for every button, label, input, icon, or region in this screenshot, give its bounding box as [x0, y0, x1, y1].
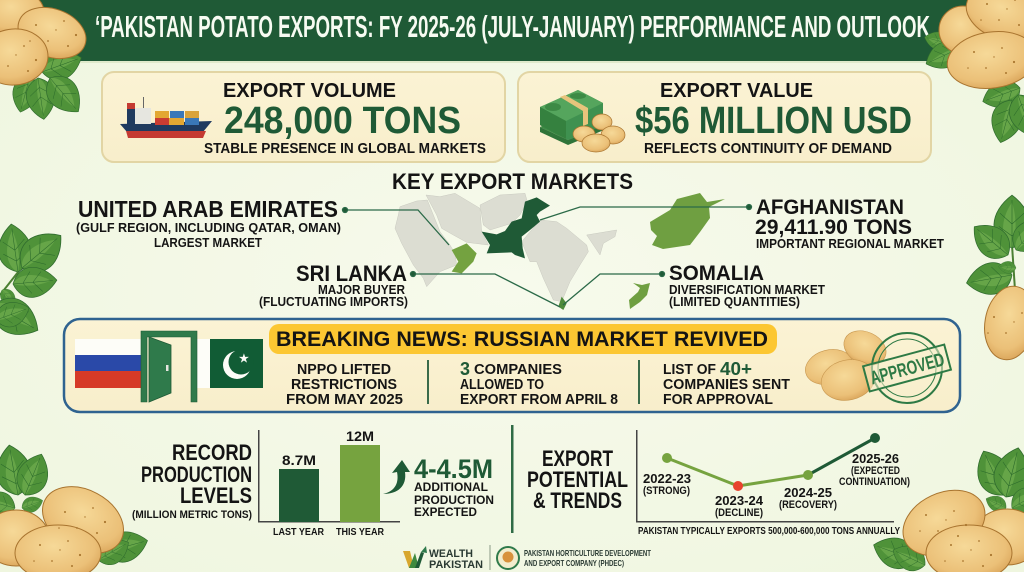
- label: Somalia: [669, 262, 825, 309]
- text: PHDEC name: AND EXPORT COMPANY (PHDEC): [524, 558, 624, 568]
- label: 2025-26: CONTINUATION): [839, 476, 910, 488]
- callout: additional production: EXPECTED: [414, 505, 477, 519]
- icon: potatoes: [801, 324, 892, 405]
- panel: breaking news: [64, 319, 960, 412]
- text: 3 companies allowed: EXPORT FROM APRIL 8: [460, 392, 618, 408]
- label: Somalia: (LIMITED QUANTITIES): [669, 294, 800, 309]
- icon: money and potatoes: [540, 90, 625, 152]
- decoration: top-right potatoes and leaves: [921, 0, 1024, 146]
- headline pill: BREAKING NEWS: RUSSIAN MARKET REVIVED: [276, 328, 768, 351]
- label: 2024-25: (RECOVERY): [779, 499, 837, 511]
- label: Sri Lanka: (FLUCTUATING IMPORTS): [259, 294, 408, 309]
- logo: PHDEC emblem: [497, 547, 519, 569]
- text: PHDEC name: [524, 548, 652, 568]
- heading: record production levels: RECORD: [172, 440, 252, 465]
- text: NPPO restrictions lifted: FROM MAY 2025: [286, 392, 403, 408]
- panel: export volume: EXPORT VOLUME: [223, 80, 396, 102]
- decoration: bottom-right potatoes and leaves: [869, 444, 1024, 572]
- callout: additional production: PRODUCTION: [414, 493, 494, 507]
- logo: Wealth Pakistan: [403, 546, 483, 571]
- bar chart: production: THIS YEAR: [336, 527, 385, 538]
- label: 2023-24: [715, 493, 764, 519]
- label: United Arab Emirates: LARGEST MARKET: [154, 235, 262, 250]
- heading: export potential and trends: POTENTIAL: [527, 467, 628, 492]
- label: United Arab Emirates: (GULF REGION, INCLUDING QATAR, OMAN): [76, 220, 341, 235]
- label: 2023-24: (DECLINE): [715, 507, 763, 519]
- heading: record production levels: LEVELS: [180, 483, 252, 508]
- text: 3 companies allowed: 3: [460, 359, 470, 379]
- label: United Arab Emirates: [76, 196, 341, 250]
- callout: additional production: [414, 454, 494, 519]
- text: list of 40+ companies: COMPANIES SENT: [663, 377, 790, 393]
- map: Somalia: [629, 283, 650, 309]
- label: 2022-23: 2022-23: [643, 471, 691, 486]
- heading: key export markets: KEY EXPORT MARKETS: [392, 169, 633, 194]
- map: Afghanistan: [650, 193, 725, 249]
- panel: export volume: STABLE PRESENCE IN GLOBAL MARKETS: [204, 140, 486, 157]
- label: Afghanistan: 29,411.90 TONS: [755, 216, 912, 239]
- text: NPPO restrictions lifted: [286, 362, 403, 408]
- heading: export potential and trends: EXPORT: [542, 446, 613, 471]
- bar chart: production: LAST YEAR: [273, 527, 325, 538]
- panel: export value: EXPORT VALUE: [660, 80, 813, 102]
- heading: record production levels: (MILLION METRIC TONS): [132, 509, 252, 521]
- heading: export potential and trends: [527, 446, 628, 513]
- label: 2025-26: (EXPECTED: [851, 465, 900, 477]
- text: 3 companies allowed: COMPANIES: [474, 362, 562, 378]
- icon: open door: [141, 331, 197, 402]
- label: 2022-23: [643, 471, 691, 497]
- heading: record production levels: PRODUCTION: [141, 462, 252, 487]
- callout: additional production: 4-4.5M: [414, 454, 493, 484]
- label: 2024-25: 2024-25: [784, 485, 832, 500]
- text: 3 companies allowed: ALLOWED TO: [460, 377, 544, 393]
- label: 2023-24: 2023-24: [715, 493, 764, 508]
- label: Sri Lanka: MAJOR BUYER: [318, 282, 406, 297]
- line chart: export trends: [636, 430, 910, 522]
- text: list of 40+ companies: [663, 359, 790, 408]
- arrow: growth: [383, 460, 410, 494]
- decoration: right mid leaves and potato: [964, 195, 1024, 364]
- icon: approved stamp: APPROVED: [868, 349, 947, 389]
- icon: Russian flag: [75, 339, 145, 388]
- map: South Asia and Gulf: [395, 193, 617, 310]
- bar chart: production: [258, 428, 400, 538]
- text: PHDEC name: PAKISTAN HORTICULTURE DEVELOPMENT: [524, 548, 652, 558]
- text: list of 40+ companies: 40+: [720, 359, 752, 379]
- label: Afghanistan: [755, 196, 944, 251]
- icon: cargo ship: [120, 97, 212, 138]
- label: Sri Lanka: [259, 261, 408, 309]
- text: 3 companies allowed: [460, 359, 618, 408]
- heading: record production levels: [132, 440, 252, 521]
- decoration: bottom-left potatoes and leaves: [0, 442, 151, 572]
- label: United Arab Emirates: UNITED ARAB EMIRATES: [78, 196, 338, 222]
- icon: Pakistan flag: ★: [239, 353, 249, 365]
- heading: export potential and trends: & TRENDS: [533, 488, 622, 513]
- label: Somalia: SOMALIA: [669, 262, 764, 285]
- logo: Wealth Pakistan: WEALTH: [429, 548, 473, 560]
- bar chart: production: 8.7M: [282, 452, 316, 468]
- label: Afghanistan: IMPORTANT REGIONAL MARKET: [756, 236, 944, 251]
- panel: export value: $56 MILLION USD: [635, 100, 912, 142]
- text: list of 40+ companies: FOR APPROVAL: [663, 392, 773, 408]
- label: 2024-25: [779, 485, 837, 511]
- text: NPPO restrictions lifted: NPPO LIFTED: [297, 362, 391, 378]
- bar chart: production: 12M: [346, 428, 374, 444]
- icon: approved stamp: [863, 333, 951, 403]
- panel: export volume: 248,000 TONS: [224, 100, 461, 142]
- text: NPPO restrictions lifted: RESTRICTIONS: [291, 377, 397, 393]
- panel: export value: REFLECTS CONTINUITY OF DEMAND: [644, 140, 892, 157]
- header banner: [0, 0, 1024, 63]
- label: Somalia: DIVERSIFICATION MARKET: [669, 282, 825, 297]
- label: Sri Lanka: SRI LANKA: [296, 261, 407, 286]
- label: 2022-23: (STRONG): [643, 485, 690, 497]
- logo: Wealth Pakistan: PAKISTAN: [429, 559, 483, 571]
- panel: export value: [518, 72, 931, 162]
- decoration: top-left potatoes and leaves: [0, 0, 93, 121]
- bar: this year: [340, 445, 380, 522]
- label: Afghanistan: AFGHANISTAN: [756, 196, 904, 219]
- text: list of 40+ companies: LIST OF: [663, 362, 716, 378]
- connector lines: [342, 204, 752, 307]
- panel: export volume: [102, 72, 505, 162]
- bar: last year: [279, 469, 319, 522]
- note: annual exports: PAKISTAN TYPICALLY EXPORTS 500,000-600,000 TONS ANNUALLY: [638, 525, 900, 537]
- label: 2025-26: [839, 451, 910, 488]
- callout: additional production: ADDITIONAL: [414, 480, 488, 494]
- decoration: left mid leaves: [0, 222, 72, 345]
- label: 2025-26: 2025-26: [852, 451, 899, 466]
- icon: Pakistan flag: [197, 339, 263, 388]
